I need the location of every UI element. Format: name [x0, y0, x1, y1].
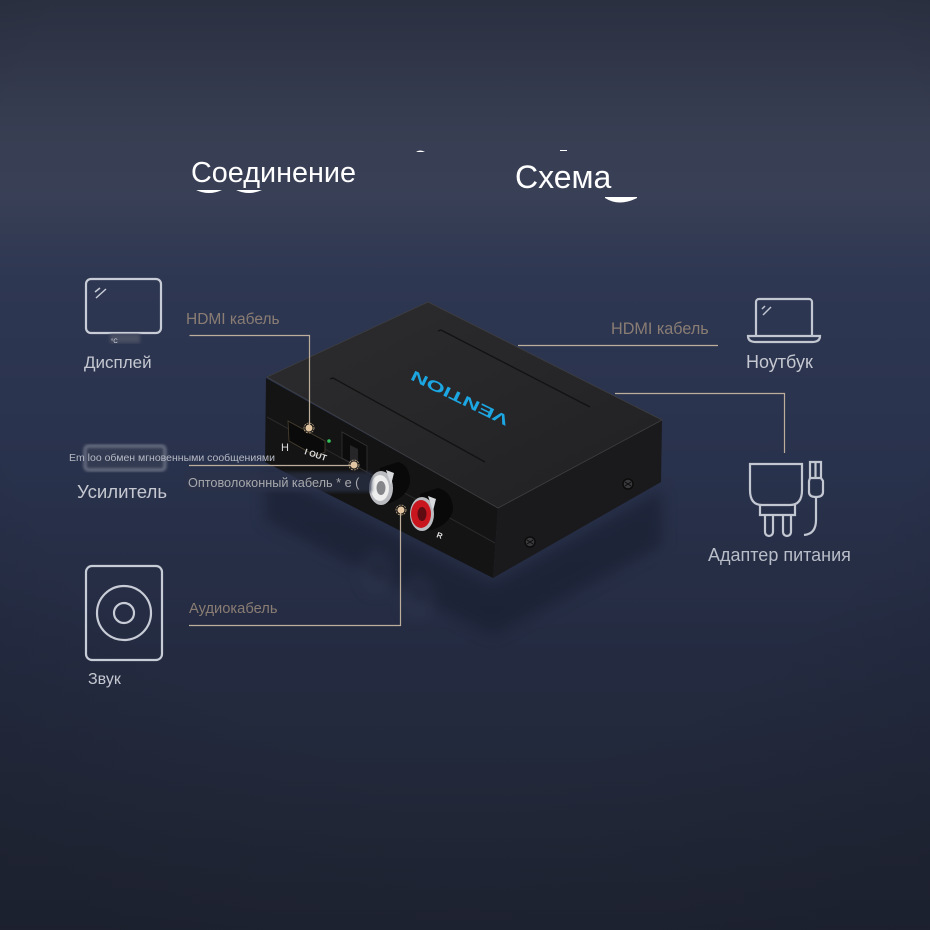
logo: VENTION — [409, 366, 512, 428]
icon: display — [86, 279, 161, 333]
title: partly masked original heading — [191, 150, 637, 202]
label: laptop: Ноутбук — [746, 352, 813, 372]
callout: audio cable — [189, 505, 406, 626]
icon: laptop — [748, 299, 820, 342]
label: display: Дисплей — [84, 353, 152, 372]
device reflection — [265, 470, 662, 635]
screws — [525, 479, 633, 547]
display stand remnant — [110, 334, 140, 345]
HDMI port — [281, 421, 331, 463]
device top face — [267, 302, 662, 508]
device front face — [265, 378, 498, 578]
icon: sound speaker — [86, 566, 162, 660]
callout: power line — [615, 394, 784, 453]
optical port — [342, 432, 367, 472]
device: Vention converter box — [265, 302, 662, 578]
callout: HDMI cable right: HDMI кабель — [611, 320, 709, 338]
label: OUT: I OUT — [303, 446, 329, 463]
callout: HDMI cable left: HDMI кабель — [186, 311, 280, 328]
title: Схема: Схема — [515, 159, 612, 195]
callout: optical cable — [185, 460, 372, 492]
label: power adapter: Адаптер питания — [708, 545, 851, 565]
label: sound: Звук — [88, 671, 122, 688]
label: R: R — [435, 530, 444, 541]
icon: power adapter — [750, 462, 823, 536]
title: Соединение: Соединение — [191, 157, 356, 189]
label: H: H — [281, 442, 289, 454]
RCA red connector — [410, 488, 453, 541]
display stand remnant: °C — [111, 339, 118, 345]
seam line — [267, 417, 495, 543]
label: amplifier: Усилитель — [77, 481, 167, 502]
amplifier overlay text: Em loo обмен мгновенными сообщениями — [69, 452, 275, 464]
device side face — [493, 420, 662, 578]
callout: HDMI cable left — [186, 311, 314, 433]
RCA white connector — [369, 462, 410, 505]
callout: optical cable: Оптоволоконный кабель * е ( — [188, 476, 360, 490]
slots on the top — [330, 330, 590, 462]
callout: audio cable: Аудиокабель — [189, 601, 278, 617]
icon: amplifier — [69, 446, 275, 470]
